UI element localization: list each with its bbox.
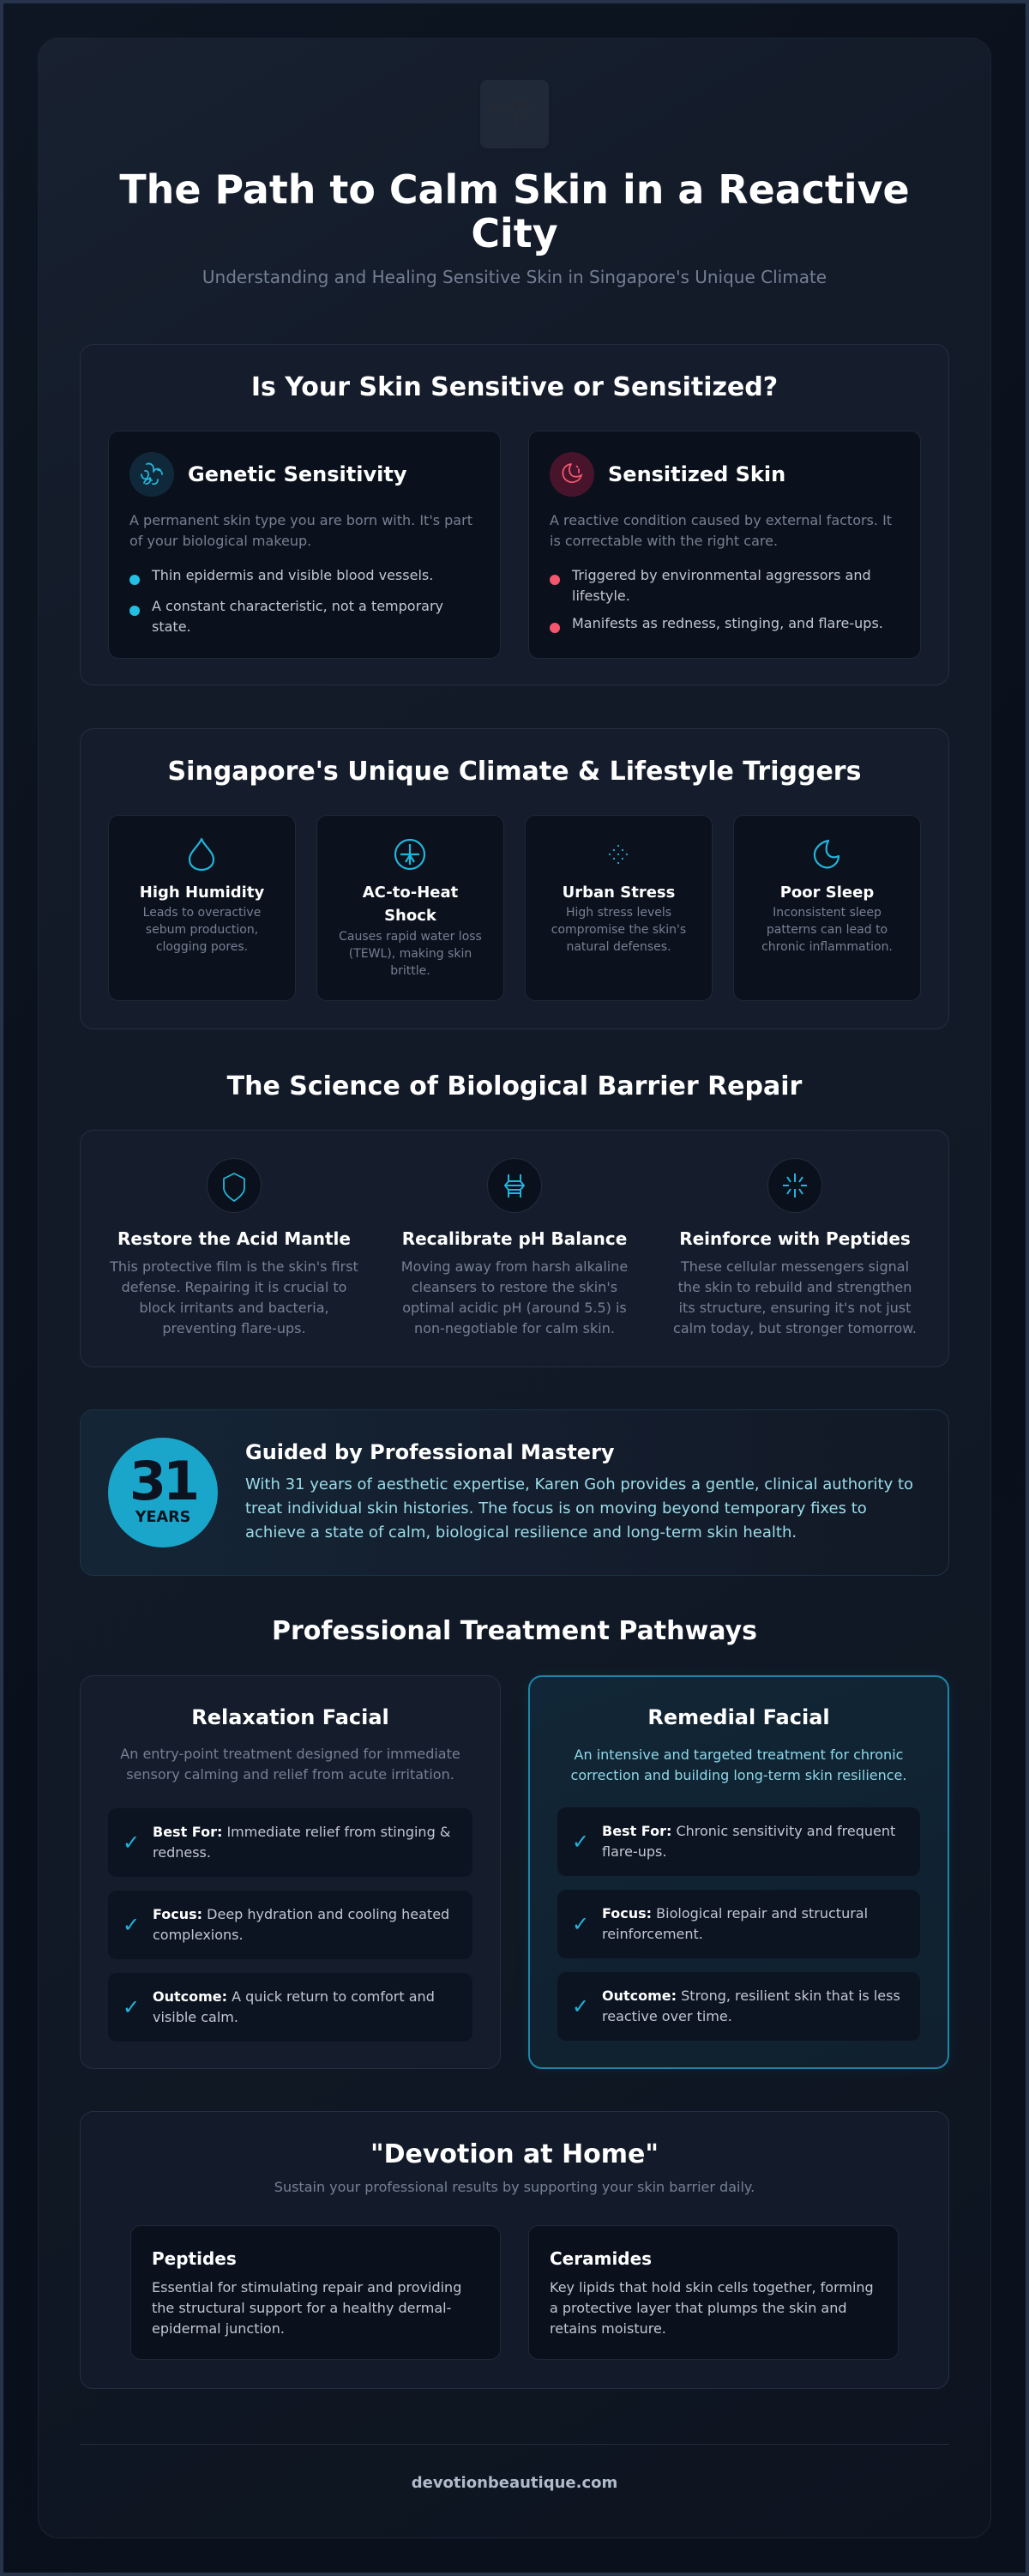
item: focus: Focus: Deep hydration and cooling heated (153, 1906, 449, 1922)
description (673, 1258, 917, 1336)
card: sensitized skin (528, 431, 921, 659)
name: Ceramides (550, 2248, 652, 2269)
description: Key lipids that hold skin cells together, forming (550, 2279, 874, 2295)
icon: dna (129, 452, 174, 497)
item: focus (557, 1890, 920, 1958)
bullet: A constant characteristic, not a temporary (152, 598, 443, 614)
description (571, 1746, 906, 1783)
description: defense. Repairing it is crucial to (122, 1279, 346, 1295)
description: sensory calming and relief from acute irritation. (126, 1766, 454, 1783)
badge: 31 years (108, 1438, 218, 1547)
description (761, 906, 893, 954)
panel: relaxation facial (80, 1675, 501, 2069)
item: focus: reinforcement. (602, 1926, 703, 1942)
description: Moving away from harsh alkaline (401, 1258, 628, 1275)
bullet: state. (152, 618, 191, 635)
description: compromise the skin's (551, 923, 686, 937)
bullet: Triggered by environmental aggressors and (572, 567, 871, 583)
panel: climate triggers (80, 728, 949, 1029)
label: Recalibrate pH Balance (402, 1228, 627, 1249)
description: brittle. (390, 964, 430, 978)
unit: YEARS (135, 1509, 190, 1526)
label: High Humidity (140, 884, 264, 902)
description: treat individual skin histories. The focus is on moving beyond temporary fixes to (245, 1499, 867, 1517)
icon: snow circle (394, 839, 425, 870)
heading: Guided by Professional Mastery (245, 1440, 615, 1464)
item: focus: ✓ (572, 1912, 589, 1936)
description (550, 512, 892, 549)
description: the structural support for a healthy dermal- (152, 2300, 451, 2316)
item: outcome (108, 1973, 472, 2042)
column: peptides (673, 1158, 917, 1336)
description: its structure, ensuring it's not just (679, 1300, 911, 1316)
item: outcome: ✓ (123, 1995, 140, 2019)
heading: Sensitized Skin (608, 462, 785, 486)
item: best for: ✓ (572, 1830, 589, 1854)
description (129, 512, 472, 549)
bullet: Manifests as redness, stinging, and flare-ups. (572, 615, 883, 631)
card: poor sleep (733, 815, 921, 1001)
description: (TEWL), making skin (349, 947, 472, 961)
card: peptides (130, 2225, 501, 2360)
description: A reactive condition caused by external factors. It (550, 512, 892, 528)
footer divider (80, 2444, 949, 2445)
column: acid mantle (110, 1158, 358, 1336)
description: An entry-point treatment designed for immediate (120, 1746, 460, 1762)
heading: barrier repair: The Science of Biological Barrier Repair (227, 1071, 802, 1101)
description: These cellular messengers signal (681, 1258, 909, 1275)
panel: remedial facial (528, 1675, 949, 2069)
description: sebum production, (146, 923, 258, 937)
description: Inconsistent sleep (773, 906, 882, 920)
label: Shock (384, 907, 436, 925)
item: outcome: ✓ (572, 1994, 589, 2018)
description (143, 906, 261, 954)
item: outcome: Outcome: Strong, resilient skin that is less (602, 1988, 900, 2004)
bullet: Thin epidermis and visible blood vessels. (152, 567, 433, 583)
heading: Singapore's Unique Climate & Lifestyle Triggers (168, 757, 861, 787)
description: correction and building long-term skin resilience. (571, 1767, 906, 1783)
icon: ladder (487, 1158, 542, 1213)
description: Causes rapid water loss (339, 930, 482, 944)
label: Poor Sleep (780, 884, 874, 902)
description (120, 1746, 460, 1783)
bullet: lifestyle. (572, 588, 630, 604)
label: Restore the Acid Mantle (117, 1228, 351, 1249)
card: urban stress (525, 815, 713, 1001)
footer: website: devotionbeautique.com (412, 2474, 617, 2492)
heading: Remedial Facial (647, 1705, 830, 1729)
panel: barrier repair (80, 1130, 949, 1367)
label (362, 884, 458, 925)
item: best for (557, 1807, 920, 1876)
description: An intensive and targeted treatment for chronic (575, 1746, 903, 1763)
title: City (471, 210, 558, 256)
item: outcome (557, 1972, 920, 2041)
subheading: Sustain your professional results by supporting your skin barrier daily. (274, 2179, 755, 2195)
card: ac to heat shock (316, 815, 504, 1001)
bullet (129, 598, 443, 635)
item: focus: complexions. (153, 1927, 244, 1943)
card: high humidity (108, 815, 296, 1001)
title: The Path to Calm Skin in a Reactive (119, 166, 910, 213)
item: best for: Best For: Chronic sensitivity and frequent (602, 1823, 895, 1839)
name: Peptides (152, 2248, 237, 2269)
item: best for: redness. (153, 1844, 211, 1861)
description: Leads to overactive (143, 906, 261, 920)
item: focus (108, 1891, 472, 1959)
item: focus: Focus: Biological repair and structural (602, 1905, 868, 1921)
icon: moon (550, 452, 594, 497)
description (245, 1475, 913, 1541)
description: High stress levels (566, 906, 671, 920)
description: chronic inflammation. (761, 940, 893, 954)
description: natural defenses. (566, 940, 671, 954)
logo (480, 80, 549, 148)
item: outcome: visible calm. (153, 2009, 238, 2025)
item: outcome: Outcome: A quick return to comfort and (153, 1988, 435, 2005)
item: best for: Best For: Immediate relief from stinging & (153, 1824, 450, 1840)
description: the skin to rebuild and strengthen (678, 1279, 912, 1295)
description: patterns can lead to (767, 923, 888, 937)
heading: Genetic Sensitivity (188, 462, 406, 486)
icon: crescent (813, 839, 840, 868)
description: preventing flare-ups. (162, 1320, 306, 1336)
label: Reinforce with Peptides (679, 1228, 911, 1249)
description: cleansers to restore the skin's (412, 1279, 617, 1295)
card: genetic sensitivity (108, 431, 501, 659)
description: non-negotiable for calm skin. (414, 1320, 615, 1336)
description: is correctable with the right care. (550, 533, 778, 549)
card: ceramides (528, 2225, 899, 2360)
icon: shield (207, 1158, 262, 1213)
description: calm today, but stronger tomorrow. (673, 1320, 917, 1336)
label: Urban Stress (563, 884, 675, 902)
panel: sensitive or sensitized (80, 344, 949, 685)
description: epidermal junction. (152, 2320, 285, 2337)
item: best for (108, 1808, 472, 1877)
title (119, 166, 910, 256)
description: With 31 years of aesthetic expertise, Karen Goh provides a gentle, clinical authority to (245, 1475, 913, 1493)
item: best for: flare-ups. (602, 1843, 666, 1860)
heading: "Devotion at Home" (370, 2139, 659, 2169)
description (550, 2279, 874, 2337)
description: Essential for stimulating repair and providing (152, 2279, 461, 2295)
description (152, 2279, 461, 2337)
icon: dots (609, 844, 628, 865)
description: block irritants and bacteria, (139, 1300, 329, 1316)
number: 31 (129, 1450, 196, 1512)
description: A permanent skin type you are born with. It's part (129, 512, 472, 528)
bullet (550, 567, 871, 604)
item: focus: ✓ (123, 1913, 140, 1937)
panel: professional mastery (80, 1409, 949, 1576)
description: optimal acidic pH (around 5.5) is (402, 1300, 627, 1316)
subtitle: Understanding and Healing Sensitive Skin in Singapore's Unique Climate (202, 267, 827, 287)
icon: drop (189, 837, 214, 872)
description: a protective layer that plumps the skin and (550, 2300, 847, 2316)
description: of your biological makeup. (129, 533, 311, 549)
description (551, 906, 686, 954)
heading: Relaxation Facial (191, 1705, 389, 1729)
description (339, 930, 482, 978)
description: retains moisture. (550, 2320, 666, 2337)
description (401, 1258, 628, 1336)
icon: burst (767, 1158, 822, 1213)
item: outcome: reactive over time. (602, 2008, 732, 2024)
panel: devotion at home (80, 2111, 949, 2389)
description: clogging pores. (156, 940, 248, 954)
heading: Is Your Skin Sensitive or Sensitized? (251, 372, 778, 402)
label: AC-to-Heat (363, 884, 458, 902)
description (110, 1258, 358, 1336)
description: achieve a state of calm, biological resilience and long-term skin health. (245, 1523, 797, 1541)
item: best for: ✓ (123, 1831, 140, 1855)
column: ph balance (401, 1158, 628, 1336)
description: This protective film is the skin's first (110, 1258, 358, 1275)
heading: treatment pathways: Professional Treatment Pathways (272, 1616, 757, 1646)
